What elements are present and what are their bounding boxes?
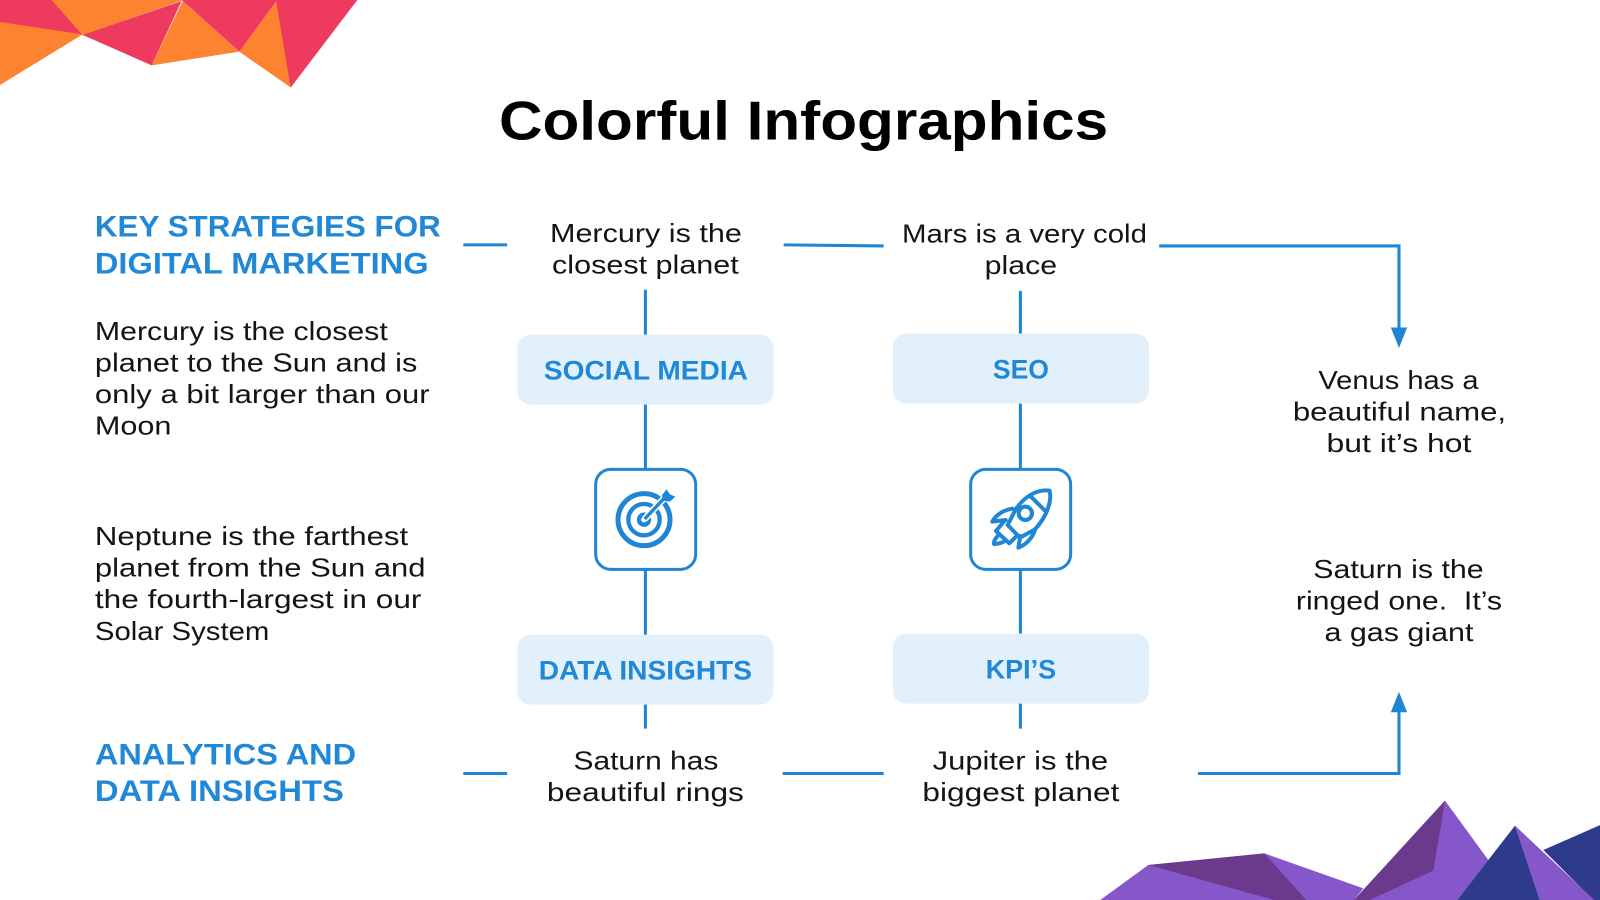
label: KPI's [893,634,1149,704]
text: Saturn node: Saturn has [573,746,718,776]
heading: key strategies: DIGITAL MARKETING [95,247,429,280]
heading: key strategies [95,211,441,280]
arrow: bottom right to Saturn [1198,692,1407,773]
text: Mercury node [550,218,742,280]
text: Jupiter node [922,746,1120,807]
text: Saturn: ringed one. It’s [1296,585,1502,615]
text: Venus: beautiful name, [1293,397,1506,427]
connectors: left column [644,290,647,729]
text: Saturn node: beautiful rings [547,777,744,807]
text: Mercury description: planet to the Sun and is [95,347,417,377]
text: Venus: Venus has a [1318,365,1479,395]
text: Mercury description [95,316,430,441]
text: Neptune description: the fourth-largest in our [95,584,422,614]
heading: analytics: DATA INSIGHTS [95,775,344,808]
text: Saturn [1296,554,1502,647]
decoration: top-left polygons [0,0,357,88]
text: Mars node: place [985,250,1057,280]
label: SEO: SEO [993,355,1049,385]
title: Colorful Infographics [499,89,1108,151]
text: Saturn: Saturn is the [1313,554,1484,584]
text: Mercury node: Mercury is the [550,218,742,248]
label: social media: SOCIAL MEDIA [544,356,748,386]
text: Mercury description: Mercury is the closest [95,316,389,346]
icon: target [596,469,696,569]
label: social media [517,335,773,405]
arrow: top right to Venus [1159,246,1407,348]
text: Neptune description: Neptune is the farthest [95,521,409,551]
text: Jupiter node: biggest planet [922,777,1120,807]
text: Mars node: Mars is a very cold [902,218,1147,248]
text: Mercury description: only a bit larger than our [95,379,430,409]
connectors: top row [463,245,1407,348]
label: data insights: DATA INSIGHTS [539,656,752,686]
text: Mercury node: closest planet [552,250,740,280]
text: Neptune description [95,521,426,646]
connectors: bottom row [463,692,1407,773]
text: Venus: but it’s hot [1327,428,1472,458]
text: Mercury description: Moon [95,411,171,441]
heading: analytics: ANALYTICS AND [95,738,356,771]
heading: key strategies: KEY STRATEGIES FOR [95,211,441,244]
text: Jupiter node: Jupiter is the [933,746,1108,776]
text: Neptune description: planet from the Sun and [95,553,426,583]
decoration: bottom-right polygons [1099,801,1600,900]
text: Venus [1293,365,1506,458]
label: data insights [517,635,773,705]
label: KPI's: KPI’S [986,655,1056,685]
text: Neptune description: Solar System [95,616,269,646]
connectors: right column [1019,291,1022,729]
heading: analytics [95,738,356,808]
icon: rocket [971,469,1071,569]
text: Saturn: a gas giant [1324,617,1474,647]
label: SEO [893,334,1149,404]
text: Mars node [902,218,1147,280]
text: Saturn node [547,746,744,807]
